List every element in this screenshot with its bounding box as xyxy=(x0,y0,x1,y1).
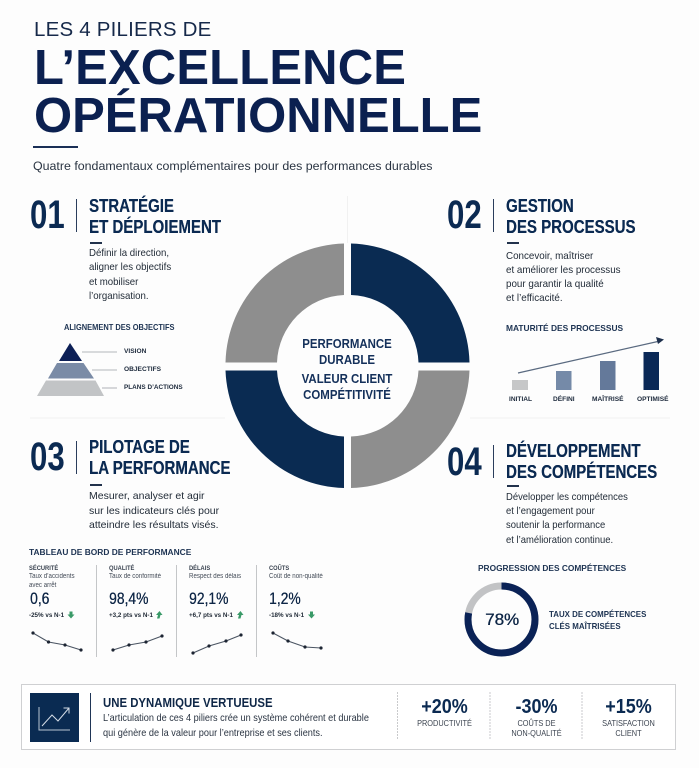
rule 04 xyxy=(507,485,519,486)
caption coûts de non-qualité: NON-QUALITÉ xyxy=(511,729,562,738)
panel: alignment pyramid xyxy=(37,323,183,396)
number 01: 01 xyxy=(30,193,64,237)
panel: pillar 04 xyxy=(446,440,657,546)
centre line: durable: DURABLE xyxy=(319,352,375,367)
KPI: coûts xyxy=(269,564,323,618)
text 01: et mobiliser xyxy=(89,276,138,288)
text 03 xyxy=(89,490,219,531)
KPI: coûts: Coût de non-qualité xyxy=(269,573,323,580)
text 02 xyxy=(506,250,621,304)
ring caption: CLÉS MAÎTRISÉES xyxy=(549,621,621,631)
KPI: sécurité: 0,6 xyxy=(30,590,49,608)
heading 02: GESTION xyxy=(506,196,574,216)
text 04: et l’engagement pour xyxy=(506,505,595,517)
title underline xyxy=(33,146,78,148)
text 01: aligner les objectifs xyxy=(89,261,171,273)
banner text: L’articulation de ces 4 piliers crée un système cohérent et durable xyxy=(103,713,369,724)
KPI: sécurité: avec arrêt xyxy=(29,582,56,588)
label: objectifs: OBJECTIFS xyxy=(124,366,161,373)
icon: growth chart xyxy=(30,693,79,742)
KPI: qualité: 98,4% xyxy=(109,590,148,608)
stat dividers xyxy=(397,692,582,739)
donut centre text xyxy=(302,336,392,402)
stat: satisfaction client xyxy=(602,696,654,738)
heading 01 xyxy=(89,196,221,236)
text 04: et l’amélioration continue. xyxy=(506,534,613,546)
banner text: qui génère de la valeur pour l’entreprise et ses clients. xyxy=(103,728,323,738)
heading 03: LA PERFORMANCE xyxy=(89,458,230,478)
caption satisfaction client: CLIENT xyxy=(615,729,641,738)
progression heading: PROGRESSION DES COMPÉTENCES xyxy=(478,563,626,573)
panel: pillar 01 xyxy=(30,193,221,302)
label: plans: PLANS D’ACTIONS xyxy=(124,384,183,391)
divider 02 xyxy=(493,199,494,232)
heading 01: STRATÉGIE xyxy=(89,196,174,216)
label: défini: DÉFINI xyxy=(553,396,575,402)
text 04: Développer les compétences xyxy=(506,491,628,503)
text 02: Concevoir, maîtriser xyxy=(506,250,593,262)
caption satisfaction client xyxy=(602,719,654,738)
title kicker: LES 4 PILIERS DE xyxy=(34,18,212,41)
panel: performance dashboard xyxy=(29,547,323,657)
sparkline: délais xyxy=(191,633,243,655)
divider 03 xyxy=(76,441,77,474)
pyramid chart xyxy=(37,343,117,396)
title line 2: OPÉRATIONNELLE xyxy=(34,88,482,142)
KPI: sécurité: -25% vs N-1 xyxy=(29,612,64,618)
panel: pillar 03 xyxy=(30,435,230,531)
text 01: Définir la direction, xyxy=(89,247,169,259)
text 04: soutenir la performance xyxy=(506,519,605,531)
KPI: délais xyxy=(189,564,241,618)
text 02: pour garantir la qualité xyxy=(506,278,604,290)
sparkline: qualité xyxy=(111,634,164,652)
value +20%: +20% xyxy=(421,696,468,718)
panel: process maturity xyxy=(506,323,669,402)
heading 04 xyxy=(506,440,657,482)
heading 02: DES PROCESSUS xyxy=(506,216,635,236)
subtitle: Quatre fondamentaux complémentaires pour des performances durables xyxy=(33,159,432,173)
KPI: délais: Respect des délais xyxy=(189,573,241,580)
text 04 xyxy=(506,491,628,546)
stat: productivité xyxy=(417,696,472,728)
caption productivité: PRODUCTIVITÉ xyxy=(417,719,472,728)
sparkline: coûts xyxy=(271,631,323,650)
KPI: délais: DÉLAIS xyxy=(189,565,210,572)
banner heading: UNE DYNAMIQUE VERTUEUSE xyxy=(103,695,273,710)
divider 04 xyxy=(493,445,494,478)
label: initial: INITIAL xyxy=(509,396,532,402)
heading 04: DES COMPÉTENCES xyxy=(506,462,657,482)
pyramid heading: ALIGNEMENT DES OBJECTIFS xyxy=(64,323,175,332)
maturity heading: MATURITÉ DES PROCESSUS xyxy=(506,323,623,333)
KPI: coûts: -18% vs N-1 xyxy=(269,612,304,618)
number 02: 02 xyxy=(446,193,481,237)
sparkline: sécurité xyxy=(31,631,83,652)
panel: virtuous dynamic banner xyxy=(21,684,676,750)
KPI: délais: 92,1% xyxy=(189,590,228,608)
rule 02 xyxy=(507,242,519,244)
heading 02 xyxy=(506,196,636,236)
centre line: compétitivité: COMPÉTITIVITÉ xyxy=(303,387,391,402)
KPI: qualité: Taux de conformité xyxy=(109,573,161,580)
divider xyxy=(90,693,91,742)
label: vision: VISION xyxy=(124,348,146,355)
caption satisfaction client: SATISFACTION xyxy=(602,719,654,728)
ring caption: TAUX DE COMPÉTENCES xyxy=(549,609,646,619)
title xyxy=(34,18,482,142)
KPI: coûts: COÛTS xyxy=(269,565,289,572)
number 03: 03 xyxy=(30,435,64,479)
label: maîtrisé: MAÎTRISÉ xyxy=(592,396,624,402)
centre line: valeur client: VALEUR CLIENT xyxy=(302,371,392,386)
text 01: l’organisation. xyxy=(89,290,149,302)
dashboard heading: TABLEAU DE BORD DE PERFORMANCE xyxy=(29,547,191,557)
text 01 xyxy=(89,247,171,302)
KPI: coûts: 1,2% xyxy=(269,590,301,608)
title line 1: L’EXCELLENCE xyxy=(34,40,406,94)
maturity chart xyxy=(512,337,664,390)
heading 03: PILOTAGE DE xyxy=(89,437,190,457)
text 03: sur les indicateurs clés pour xyxy=(89,504,219,516)
value +15%: +15% xyxy=(605,696,651,718)
divider 01 xyxy=(76,199,77,232)
banner text xyxy=(103,713,369,738)
text 02: et l’efficacité. xyxy=(506,292,563,304)
value -30%: -30% xyxy=(515,696,558,718)
KPI: qualité xyxy=(109,564,161,618)
panel: skills progression xyxy=(464,563,646,656)
ring value: 78% xyxy=(485,610,519,629)
heading 01: ET DÉPLOIEMENT xyxy=(89,216,221,236)
KPI: délais: +6,7 pts vs N-1 xyxy=(189,612,233,618)
text 03: Mesurer, analyser et agir xyxy=(89,490,205,502)
KPI: qualité: +3,2 pts vs N-1 xyxy=(109,612,153,618)
heading 04: DÉVELOPPEMENT xyxy=(506,441,640,461)
centre line: performance: PERFORMANCE xyxy=(302,336,392,351)
rule 03 xyxy=(90,484,102,486)
text 02: et améliorer les processus xyxy=(506,264,621,276)
ring caption xyxy=(549,609,646,631)
label: optimisé: OPTIMISÉ xyxy=(637,396,669,402)
dashboard graphics xyxy=(31,565,323,657)
text 03: atteindre les résultats visés. xyxy=(89,519,219,531)
KPI: sécurité: SÉCURITÉ xyxy=(29,565,58,572)
rule 01 xyxy=(90,242,102,244)
heading 03 xyxy=(89,437,230,478)
stat: coûts de non-qualité xyxy=(511,696,562,738)
trend arrows xyxy=(68,611,315,618)
number 04: 04 xyxy=(446,440,481,484)
KPI: sécurité xyxy=(29,564,75,618)
caption coûts de non-qualité: COÛTS DE xyxy=(517,719,556,728)
panel: pillar 02 xyxy=(446,193,636,304)
caption coûts de non-qualité xyxy=(511,718,562,738)
KPI: sécurité: Taux d’accidents xyxy=(29,573,75,580)
progress ring 78% xyxy=(464,582,538,656)
KPI: qualité: QUALITÉ xyxy=(109,565,134,572)
